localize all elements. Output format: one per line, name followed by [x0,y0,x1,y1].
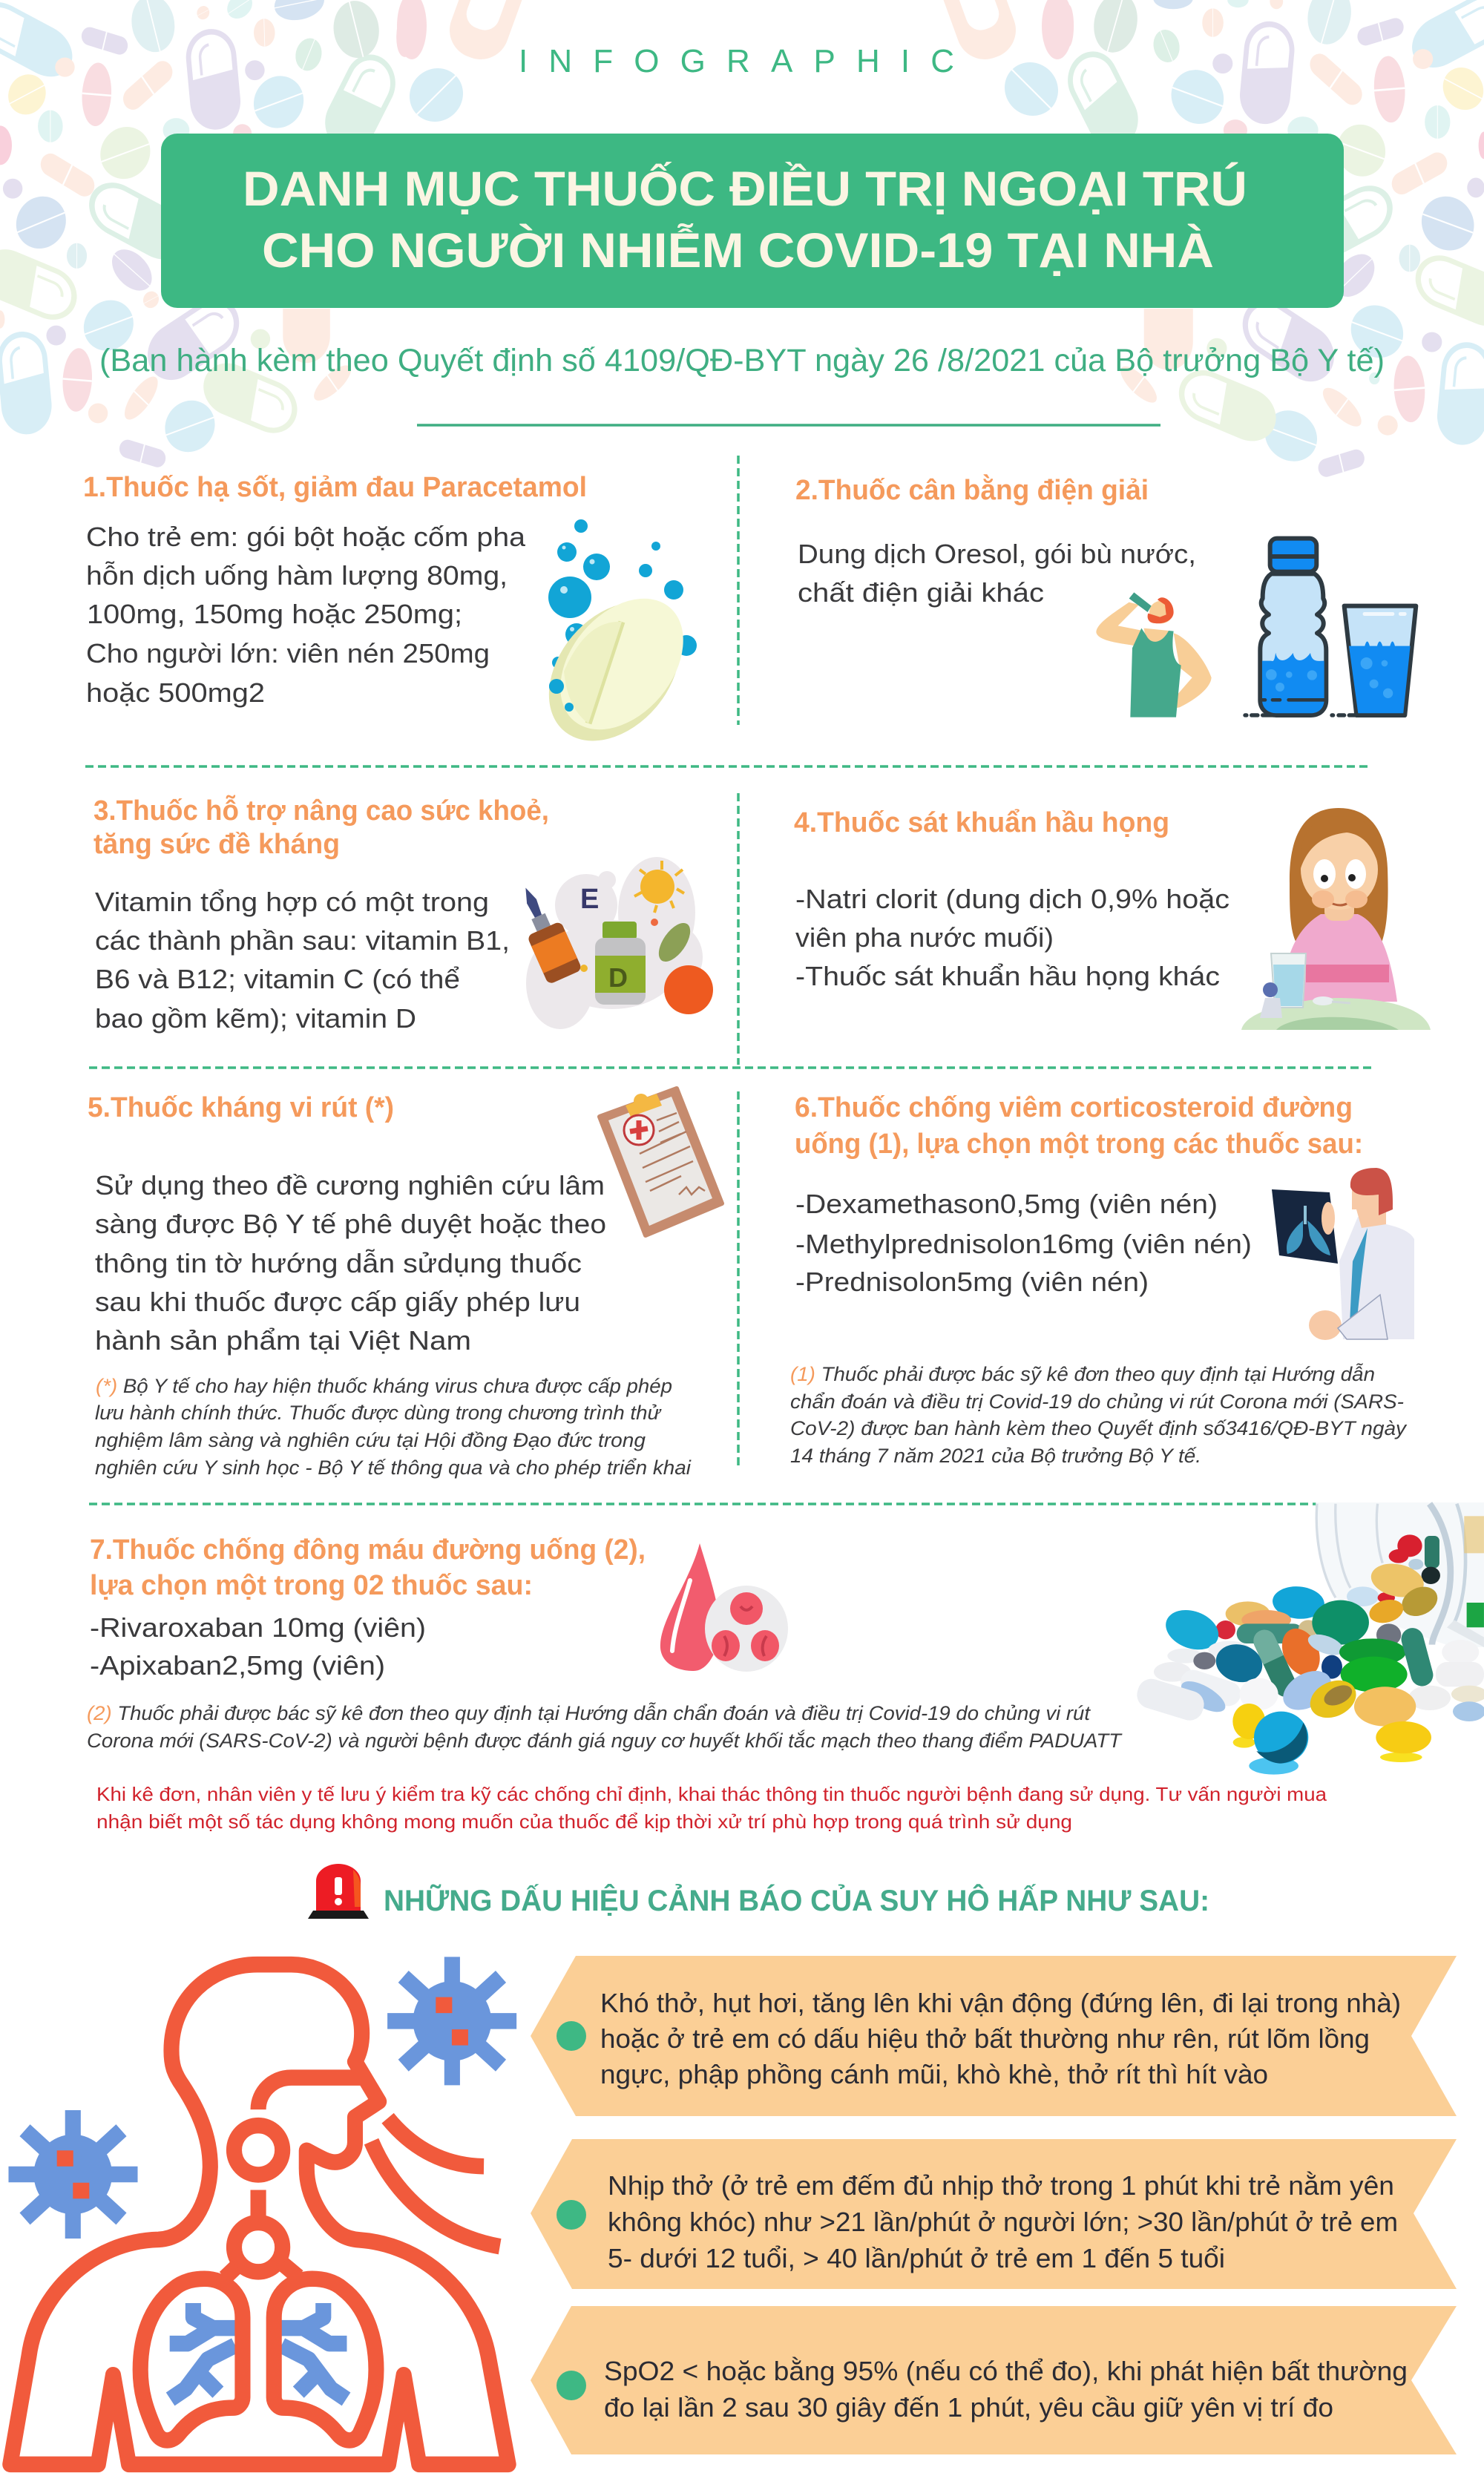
body 6: -Dexamethason0,5mg (viên nén) [795,1189,1218,1219]
panel: 6 corticosteroid [790,1092,1414,1467]
body 2 [798,539,1196,608]
body 1: Cho trẻ em: gói bột hoặc cốm pha [86,522,526,552]
footnote 6: chẩn đoán và điều trị Covid-19 do chủng vi rút Corona mới (SARS- [790,1390,1404,1413]
body 2: Dung dịch Oresol, gói bù nước, [798,539,1196,569]
arrow card 3 [531,2306,1457,2454]
heading 2: 2.Thuốc cân bằng điện giải [795,473,1149,506]
warning note: nhận biết một số tác dụng không mong muốn của thuốc để kịp thời xử trí phù hợp trong quá trình sử dụng [96,1810,1072,1833]
footnote 5: lưu hành chính thức. Thuốc được dùng trong chương trình thử [95,1402,662,1424]
footnote 5: (*) Bộ Y tế cho hay hiện thuốc kháng virus chưa được cấp phép [96,1375,672,1397]
body 3: các thành phần sau: vitamin B1, [95,925,510,956]
panel: 7 anticoagulants [87,1502,1484,1775]
arrow card 2 [531,2139,1457,2289]
arrow card 3: đo lại lần 2 sau 30 giây đến 1 phút, yêu cầu giữ yên vị trí đo [604,2392,1333,2423]
arrow card 2: 5- dưới 12 tuổi, > 40 lần/phút ở trẻ em 1 đến 5 tuổi [608,2243,1225,2273]
footnote 6: (1) Thuốc phải được bác sỹ kê đơn theo quy định tại Hướng dẫn [790,1363,1375,1385]
icon: effervescent tablet with bubbles [522,519,708,766]
icon: girl gargling [1241,808,1431,1030]
arrow card 1: ngực, phập phồng cánh mũi, khò khè, thở rít thì hít vào [600,2059,1268,2089]
arrow card 2: không khóc) như >21 lần/phút ở người lớn; >30 lần/phút ở trẻ em [608,2207,1398,2237]
title line 1: DANH MỤC THUỐC ĐIỀU TRỊ NGOẠI TRÚ [243,161,1247,216]
heading: infographic label: INFOGRAPHIC [519,43,954,79]
icon: man drinking [1096,592,1212,717]
warning note [96,1783,1327,1833]
footnote 6 [790,1363,1408,1467]
title line 2: CHO NGƯỜI NHIỄM COVID-19 TẠI NHÀ [262,223,1214,277]
body 2: chất điện giải khác [798,577,1044,608]
heading 7 [90,1534,646,1601]
body 3 [95,887,510,1034]
icon: vitamins: E [580,884,599,915]
body 1: 100mg, 150mg hoặc 250mg; [87,599,462,629]
body 1: hỗn dịch uống hàm lượng 80mg, [86,560,508,591]
lungs [140,2279,376,2440]
illustration: lungs and viruses [8,1957,516,2464]
icon: blood drop and cells [660,1543,788,1672]
footnote 6: CoV-2) được ban hành kèm theo Quyết định số3416/QĐ-BYT ngày [790,1417,1408,1439]
heading 6: uống (1), lựa chọn một trong các thuốc sau: [795,1129,1363,1160]
heading 4: 4.Thuốc sát khuẩn hầu họng [794,807,1169,838]
body 3: B6 và B12; vitamin C (có thể [95,964,460,994]
body outline [10,1965,508,2464]
body 7: -Rivaroxaban 10mg (viên) [90,1612,426,1643]
body 5: sàng được Bộ Y tế phê duyệt hoặc theo [95,1209,606,1239]
footnote 6: 14 tháng 7 năm 2021 của Bộ trưởng Bộ Y tế. [790,1445,1201,1467]
warning note: Khi kê đơn, nhân viên y tế lưu ý kiểm tra kỹ các chống chỉ định, khai thác thông tin thuốc người bệnh đang sử dụng. Tư vấn người mua [96,1783,1327,1805]
heading 3: tăng sức đề kháng [93,829,340,860]
arrow card 2: Nhịp thở (ở trẻ em đếm đủ nhịp thở trong 1 phút khi trẻ nằm yên [608,2170,1394,2201]
virus left [8,2110,138,2239]
body 3: bao gồm kẽm); vitamin D [95,1003,416,1034]
footnote 7 [87,1702,1123,1752]
body 5: Sử dụng theo đề cương nghiên cứu lâm [95,1170,605,1201]
title banner [161,134,1344,308]
panel: 2 electrolyte [795,473,1416,717]
body 4 [795,884,1229,991]
body 5: hành sản phẩm tại Việt Nam [95,1325,471,1356]
body 4: -Natri clorit (dung dịch 0,9% hoặc [795,884,1229,914]
body 7: -Apixaban2,5mg (viên) [90,1650,385,1681]
body 4: viên pha nước muối) [795,922,1054,953]
heading 3 [93,794,549,860]
arrow card 1: Khó thở, hụt hơi, tăng lên khi vận động (đứng lên, đi lại trong nhà) [600,1988,1401,2018]
icon: glass of water [1332,606,1416,715]
subtitle: (Ban hành kèm theo Quyết định số 4109/QĐ-BYT ngày 26 /8/2021 của Bộ trưởng Bộ Y tế) [99,343,1385,378]
background pattern: pastel pills [0,0,1484,479]
body 6: -Methylprednisolon16mg (viên nén) [795,1229,1252,1259]
icon: medical clipboard [600,1088,722,1235]
arrow card 1 [531,1956,1457,2116]
icon: water bottle [1245,539,1326,715]
body 4: -Thuốc sát khuẩn hầu họng khác [795,961,1220,991]
bronchi [170,2303,347,2399]
icon: red alarm [308,1864,369,1919]
body 1: Cho người lớn: viên nén 250mg [86,638,490,669]
icon: vitamins [509,857,713,1029]
footnote 5: nghiệm lâm sàng và nghiên cứu tại Hội đồng Đạo đức trong [95,1429,646,1451]
heading 1: 1.Thuốc hạ sốt, giảm đau Paracetamol [83,472,587,503]
virus right [387,1957,516,2085]
arrow card 1: hoặc ở trẻ em có dấu hiệu thở bất thường như rên, rút lõm lồng [600,2023,1370,2054]
body 5: thông tin tờ hướng dẫn sửdụng thuốc [95,1248,582,1278]
body 7 [90,1612,426,1681]
body 5: sau khi thuốc được cấp giấy phép lưu [95,1287,580,1317]
heading: warning signs: NHỮNG DẤU HIỆU CẢNH BÁO CỦA SUY HÔ HẤP NHƯ SAU: [384,1883,1209,1917]
body 5 [95,1170,606,1356]
arrow card 3: SpO2 < hoặc bằng 95% (nếu có thể đo), khi phát hiện bất thường [604,2356,1408,2386]
footnote 5: nghiên cứu Y sinh học - Bộ Y tế thông qua và cho phép triển khai [95,1456,692,1479]
heading 6: 6.Thuốc chống viêm corticosteroid đường [795,1092,1353,1123]
body 6: -Prednisolon5mg (viên nén) [795,1267,1149,1297]
body 1 [86,522,526,708]
image: spilled colourful pills and glass jar [1134,1502,1484,1775]
body 1: hoặc 500mg2 [86,677,265,708]
body 6 [795,1189,1252,1297]
heading 7: lựa chọn một trong 02 thuốc sau: [90,1570,533,1601]
icon: vitamins: D [608,962,628,993]
icon: doctor with x-ray [1272,1168,1414,1340]
heading 6 [795,1092,1363,1160]
heading 7: 7.Thuốc chống đông máu đường uống (2), [90,1534,646,1566]
panel: 5 antivirals [88,1088,722,1479]
panel: 3 vitamins [93,794,713,1034]
panel: 4 throat antiseptic [794,807,1431,1030]
footnote 7: Corona mới (SARS-CoV-2) và người bệnh được đánh giá nguy cơ huyết khối tắc mạch theo thang điểm PADUATT [87,1729,1123,1752]
heading 3: 3.Thuốc hỗ trợ nâng cao sức khoẻ, [93,794,549,827]
footnote 7: (2) Thuốc phải được bác sỹ kê đơn theo quy định tại Hướng dẫn chẩn đoán và điều trị Covid-19 do chủng vi rút [87,1702,1091,1724]
body 3: Vitamin tổng hợp có một trong [95,887,489,917]
panel: 1 paracetamol [83,472,708,766]
heading 5: 5.Thuốc kháng vi rút (*) [88,1092,394,1123]
footnote 5 [95,1375,692,1479]
